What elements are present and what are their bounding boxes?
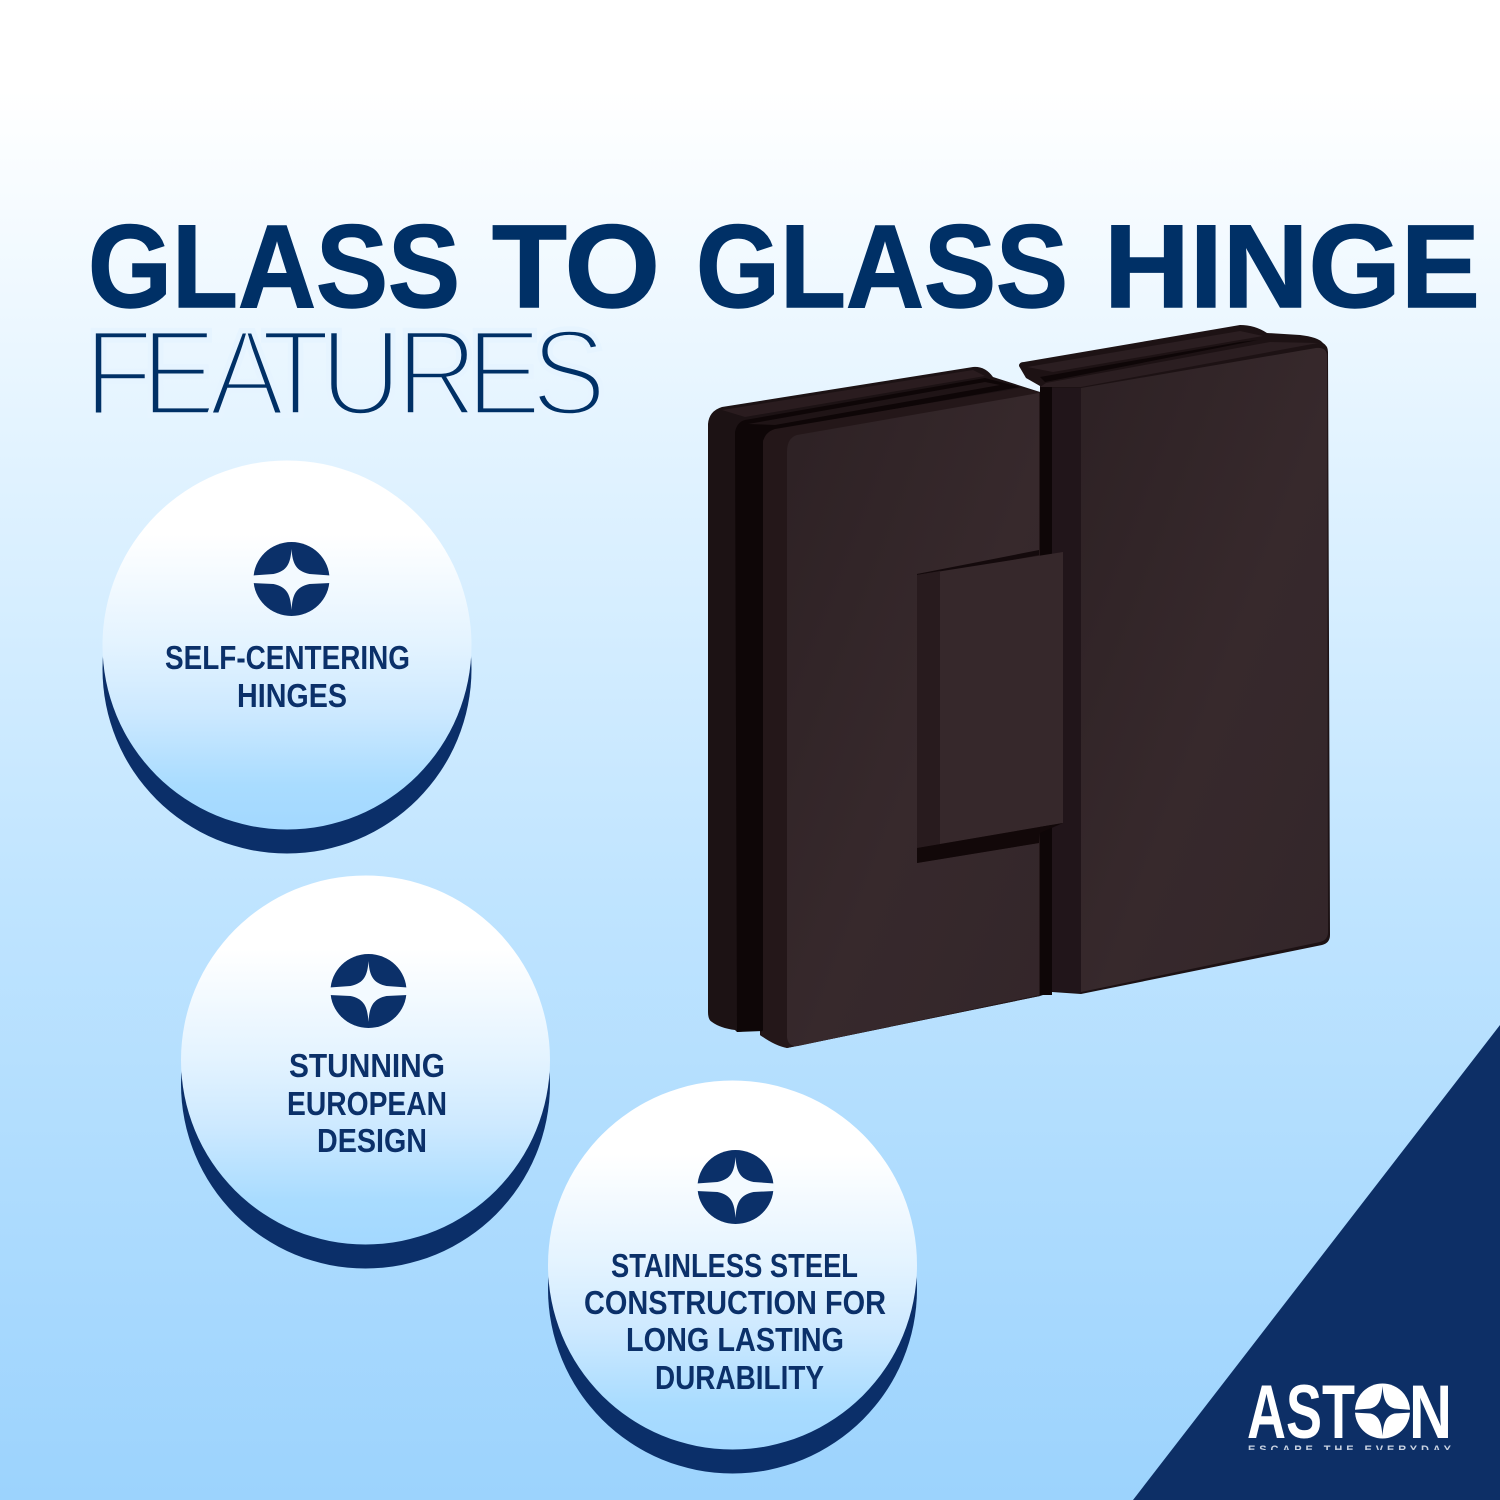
- left middle top band: [748, 382, 1000, 425]
- right rear body: [1019, 325, 1330, 996]
- label: DURABILITY: [655, 1359, 824, 1396]
- circle shadow: [548, 1104, 917, 1474]
- label: STAINLESS STEEL: [611, 1247, 858, 1284]
- circle shadow: [102, 484, 472, 854]
- right side strip: [1052, 388, 1081, 993]
- corner triangle: [1133, 1025, 1500, 1500]
- label: EUROPEAN: [287, 1085, 447, 1122]
- left middle slot: [735, 378, 1020, 1032]
- pivot shadow: [917, 823, 1063, 863]
- icon: star badge: [696, 1150, 774, 1224]
- title: HINGE: [1104, 201, 1480, 333]
- feature circle: stunning european design: [181, 876, 550, 1268]
- logo O star mark: [1352, 1384, 1412, 1438]
- label: STUNNING: [289, 1047, 445, 1084]
- label: [584, 1247, 886, 1396]
- right groove: [1040, 340, 1258, 382]
- pivot top shadow: [917, 550, 1039, 578]
- hinge product image: [708, 325, 1330, 1048]
- right face: [1081, 348, 1328, 992]
- circle face: [102, 460, 472, 830]
- left face: [787, 393, 1039, 1046]
- icon: star badge: [330, 954, 408, 1028]
- right front top band: [1040, 342, 1318, 387]
- circle face: [548, 1080, 917, 1450]
- logo letter N: N: [1409, 1370, 1452, 1455]
- hinge pivot block: [917, 552, 1063, 848]
- title: GLASS: [88, 201, 460, 333]
- feature circle: self-centering hinges: [102, 460, 472, 854]
- label: CONSTRUCTION FOR: [584, 1284, 886, 1321]
- title: TO: [492, 201, 660, 333]
- label: HINGES: [237, 677, 347, 714]
- subtitle: FEATURES: [84, 305, 607, 442]
- label: LONG LASTING: [626, 1321, 844, 1358]
- left rear body: [708, 367, 1040, 1048]
- label: SELF-CENTERING: [165, 639, 410, 676]
- left rear top band: [722, 370, 985, 417]
- circle face: [181, 876, 550, 1244]
- center gap: [1040, 387, 1052, 995]
- logo tagline: ESCAPE THE EVERYDAY: [1248, 1444, 1452, 1456]
- label: DESIGN: [317, 1122, 427, 1159]
- title: [88, 201, 1480, 333]
- title: GLASS: [696, 201, 1068, 333]
- logo: Aston: [1248, 1384, 1451, 1450]
- logo letters AST: AST: [1247, 1370, 1355, 1455]
- circle shadow: [181, 900, 550, 1268]
- pivot bevel: [917, 571, 940, 848]
- feature circle: stainless steel construction: [548, 1080, 917, 1474]
- label: [287, 1047, 447, 1159]
- icon: star badge: [252, 542, 330, 616]
- right rear top band: [1027, 331, 1263, 372]
- left front edge: [760, 388, 1040, 1048]
- label: [165, 639, 410, 714]
